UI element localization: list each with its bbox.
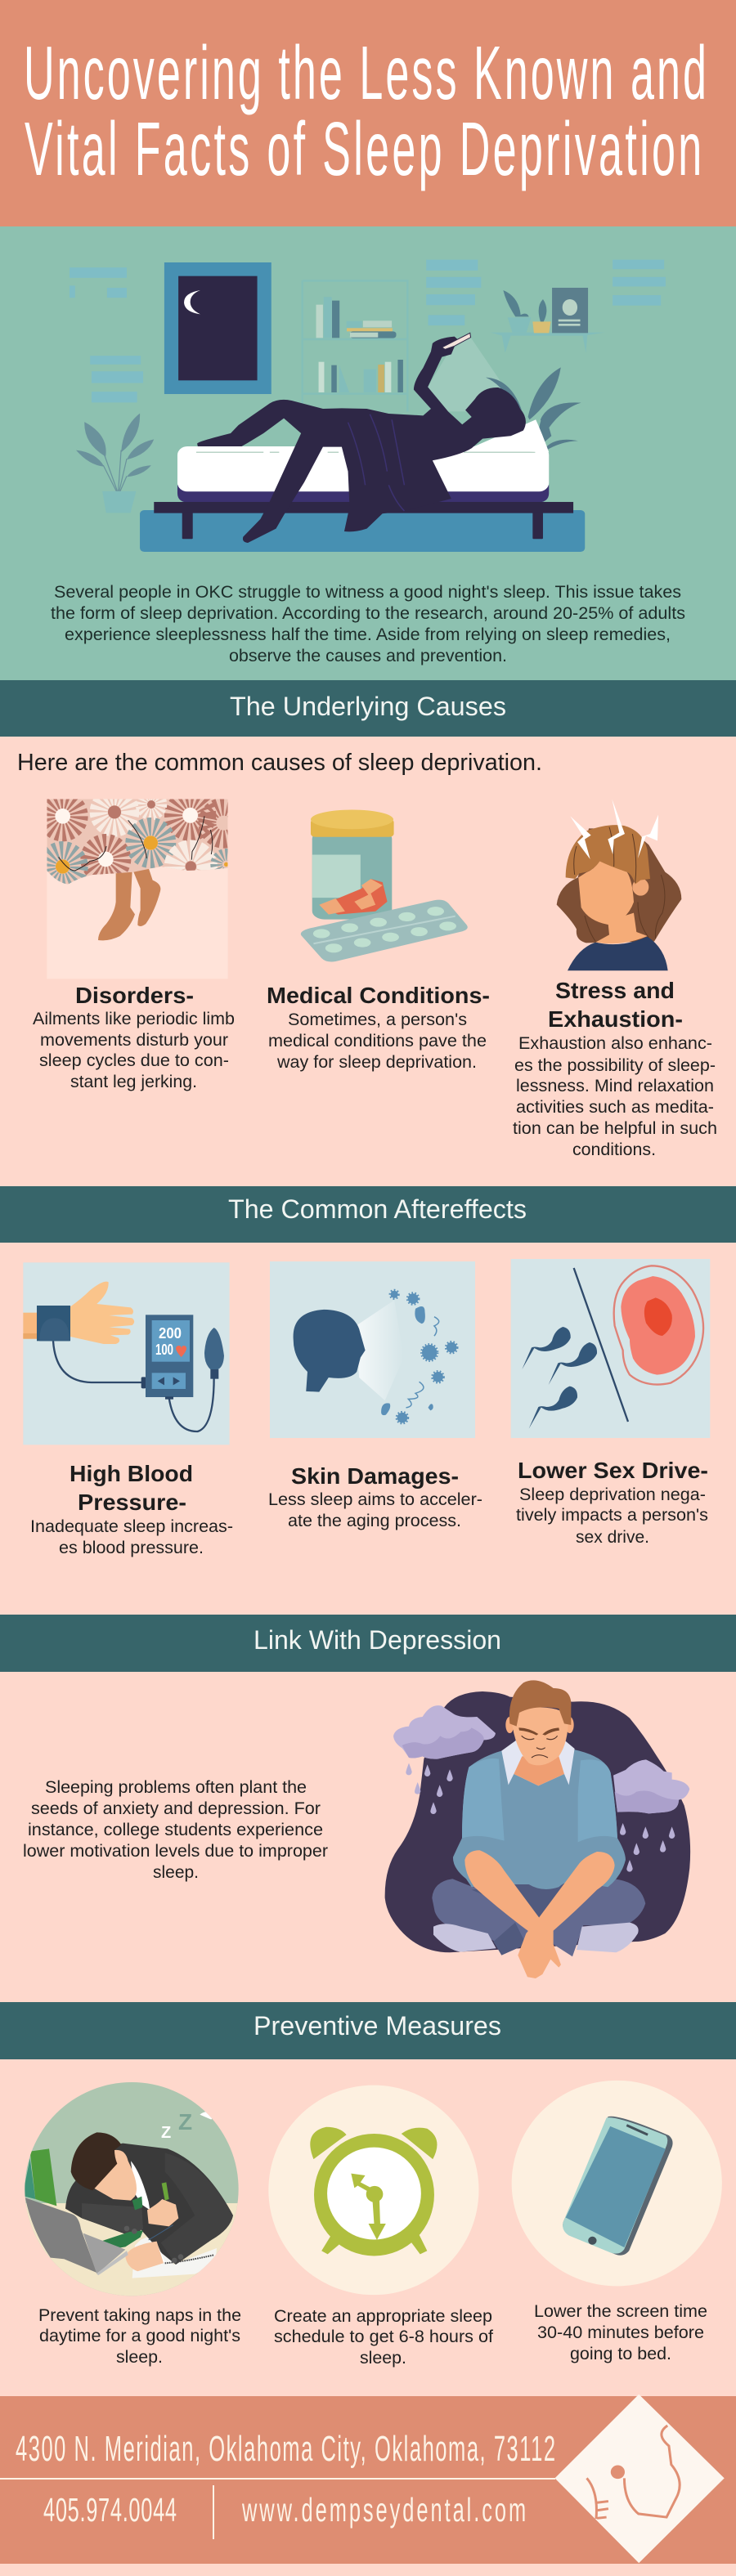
text: high blood pressure: es blood pressure. xyxy=(59,1539,204,1557)
collar xyxy=(501,1740,575,1785)
text: stress and exhaustion: Stress and xyxy=(555,978,675,1003)
text: high blood pressure: Pressure- xyxy=(78,1490,186,1515)
panel: the underlying causes xyxy=(0,680,736,1159)
illustration: sad man under rain clouds xyxy=(385,1680,690,1978)
window with moon xyxy=(164,262,272,394)
blanket folds xyxy=(348,414,404,511)
phone number: 405.974.0044 xyxy=(43,2492,177,2529)
arms and hands xyxy=(464,1850,615,1978)
text: medical conditions: medical conditions pave the xyxy=(268,1032,487,1051)
right plant xyxy=(486,367,581,451)
depression paragraph: sleep. xyxy=(153,1863,199,1882)
text: high blood pressure: High Blood xyxy=(70,1461,193,1486)
depression paragraph: instance, college students experience xyxy=(28,1821,323,1839)
introduction paragraph: Several people in OKC struggle to witness a good night's sleep. This issue takes xyxy=(54,583,681,602)
text: screen time: 30-40 minutes before xyxy=(537,2323,704,2342)
rain drops xyxy=(406,1763,675,1872)
text: stress and exhaustion: lessness. Mind relaxation xyxy=(516,1077,714,1095)
text: stress and exhaustion: tion can be helpful in such xyxy=(513,1119,717,1138)
text: skin damages xyxy=(268,1463,482,1530)
faint wall decorations xyxy=(70,260,666,402)
depression paragraph xyxy=(23,1778,328,1882)
platform and bed xyxy=(140,419,585,552)
icon: man asleep at desk xyxy=(20,2082,244,2301)
panel: link with depression xyxy=(0,1615,736,1978)
icon: head with airborne germs xyxy=(270,1261,475,1438)
text: disorders: Ailments like periodic limb xyxy=(33,1010,235,1028)
panel: footer contact details xyxy=(0,2395,736,2564)
left cloud xyxy=(393,1705,496,1759)
introduction paragraph: experience sleeplessness half the time. Aside from relying on sleep remedies, xyxy=(65,625,671,644)
icon: diamond dental logo xyxy=(554,2395,725,2563)
text: lower sex drive xyxy=(516,1458,708,1547)
sweater xyxy=(453,1749,626,1889)
depression paragraph: seeds of anxiety and depression. For xyxy=(31,1799,321,1818)
right cloud xyxy=(613,1759,689,1813)
text: disorders: stant leg jerking. xyxy=(70,1073,197,1091)
heading: the common aftereffects: The Common Aftereffects xyxy=(228,1194,527,1224)
icon: smartphone xyxy=(512,2081,722,2286)
sleep letters: Z xyxy=(178,2109,192,2135)
text: skin damages: Skin Damages- xyxy=(291,1463,459,1489)
text: high blood pressure xyxy=(30,1461,233,1557)
monitor reading xyxy=(155,1324,182,1358)
text: medical conditions: Medical Conditions- xyxy=(267,983,490,1008)
icon: woman with headache xyxy=(557,799,681,970)
light beam from phone xyxy=(428,337,501,411)
text: sleep schedule: Create an appropriate sleep xyxy=(274,2307,492,2326)
text: screen time: Lower the screen time xyxy=(534,2302,707,2321)
icon: sperm and egg xyxy=(511,1259,710,1438)
text: disorders: movements disturb your xyxy=(40,1031,228,1050)
text: prevent naps xyxy=(38,2306,241,2367)
illustration: bedroom with person on phone xyxy=(140,262,604,552)
text: high blood pressure: Inadequate sleep increas- xyxy=(30,1517,233,1536)
text: stress and exhaustion: es the possibility of sleep- xyxy=(514,1056,716,1075)
title text: Uncovering the Less Known and xyxy=(24,30,707,115)
text: lower sex drive: sex drive. xyxy=(576,1528,649,1547)
text: disorders: sleep cycles due to con- xyxy=(39,1051,229,1070)
title banner xyxy=(0,0,736,226)
text: medical conditions xyxy=(267,983,490,1072)
intro sentence: Here are the common causes of sleep deprivation. xyxy=(17,750,542,776)
depression paragraph: lower motivation levels due to improper xyxy=(23,1842,328,1861)
panel: the common aftereffects xyxy=(0,1186,736,1557)
icon: blood pressure monitor xyxy=(23,1262,230,1445)
text: lower sex drive: tively impacts a person's xyxy=(516,1506,708,1525)
text: medical conditions: way for sleep deprivation. xyxy=(276,1053,477,1072)
introduction paragraph xyxy=(51,583,685,665)
heading: preventive measures: Preventive Measures xyxy=(254,2011,501,2041)
person silhouette xyxy=(197,337,526,543)
website: www.dempseydental.com xyxy=(241,2492,526,2529)
text: skin damages: ate the aging process. xyxy=(288,1512,461,1530)
text: prevent naps: Prevent taking naps in the xyxy=(38,2306,241,2325)
icon: pill bottle and blister pack xyxy=(301,810,468,961)
icon: legs under floral blanket xyxy=(47,795,240,979)
heading: the underlying causes: The Underlying Causes xyxy=(230,692,506,721)
monitor reading: 200 xyxy=(159,1324,182,1342)
dark background blob xyxy=(385,1691,690,1952)
text: disorders xyxy=(33,983,235,1091)
text: stress and exhaustion: Exhaustion- xyxy=(548,1006,683,1032)
introduction paragraph: the form of sleep deprivation. According to the research, around 20-25% of adults xyxy=(51,604,685,623)
text: lower sex drive: Lower Sex Drive- xyxy=(518,1458,708,1483)
sleep letters: Z xyxy=(161,2124,171,2142)
sleep letters xyxy=(161,2109,192,2142)
head xyxy=(505,1680,574,1785)
legs and socks xyxy=(432,1879,645,1956)
depression paragraph: Sleeping problems often plant the xyxy=(45,1778,307,1797)
bookshelf xyxy=(303,280,407,411)
text: medical conditions: Sometimes, a person's xyxy=(288,1010,467,1029)
heading: link with depression: Link With Depression xyxy=(254,1625,501,1655)
text: sleep schedule xyxy=(274,2307,493,2368)
phone xyxy=(442,333,471,349)
title text: Vital Facts of Sleep Deprivation xyxy=(25,106,702,191)
text: lower sex drive: Sleep deprivation nega- xyxy=(519,1485,706,1504)
text: stress and exhaustion: Exhaustion also enhanc- xyxy=(518,1034,712,1053)
text: stress and exhaustion: activities such as medita- xyxy=(516,1098,714,1117)
text: prevent naps: sleep. xyxy=(116,2348,163,2367)
wall shelf with plants and frame xyxy=(491,288,604,353)
icon: alarm clock xyxy=(268,2085,478,2295)
text: screen time: going to bed. xyxy=(570,2345,671,2363)
text: sleep schedule: schedule to get 6-8 hours of xyxy=(274,2327,493,2346)
address: 4300 N. Meridian, Oklahoma City, Oklahoma, 73112 xyxy=(16,2428,555,2469)
text: prevent naps: daytime for a good night's xyxy=(39,2327,240,2345)
title text xyxy=(24,30,707,191)
text: sleep schedule: sleep. xyxy=(360,2349,406,2368)
introduction paragraph: observe the causes and prevention. xyxy=(229,647,507,665)
icon: left potted plant xyxy=(76,414,154,513)
text: screen time xyxy=(534,2302,707,2363)
panel: preventive measures xyxy=(0,2002,736,2368)
text: disorders: Disorders- xyxy=(75,983,194,1008)
text: skin damages: Less sleep aims to acceler- xyxy=(268,1490,482,1509)
text: stress and exhaustion xyxy=(513,978,717,1159)
panel: hero illustration and introduction xyxy=(0,226,736,680)
text: stress and exhaustion: conditions. xyxy=(572,1140,656,1159)
monitor reading: 100 xyxy=(155,1341,173,1358)
